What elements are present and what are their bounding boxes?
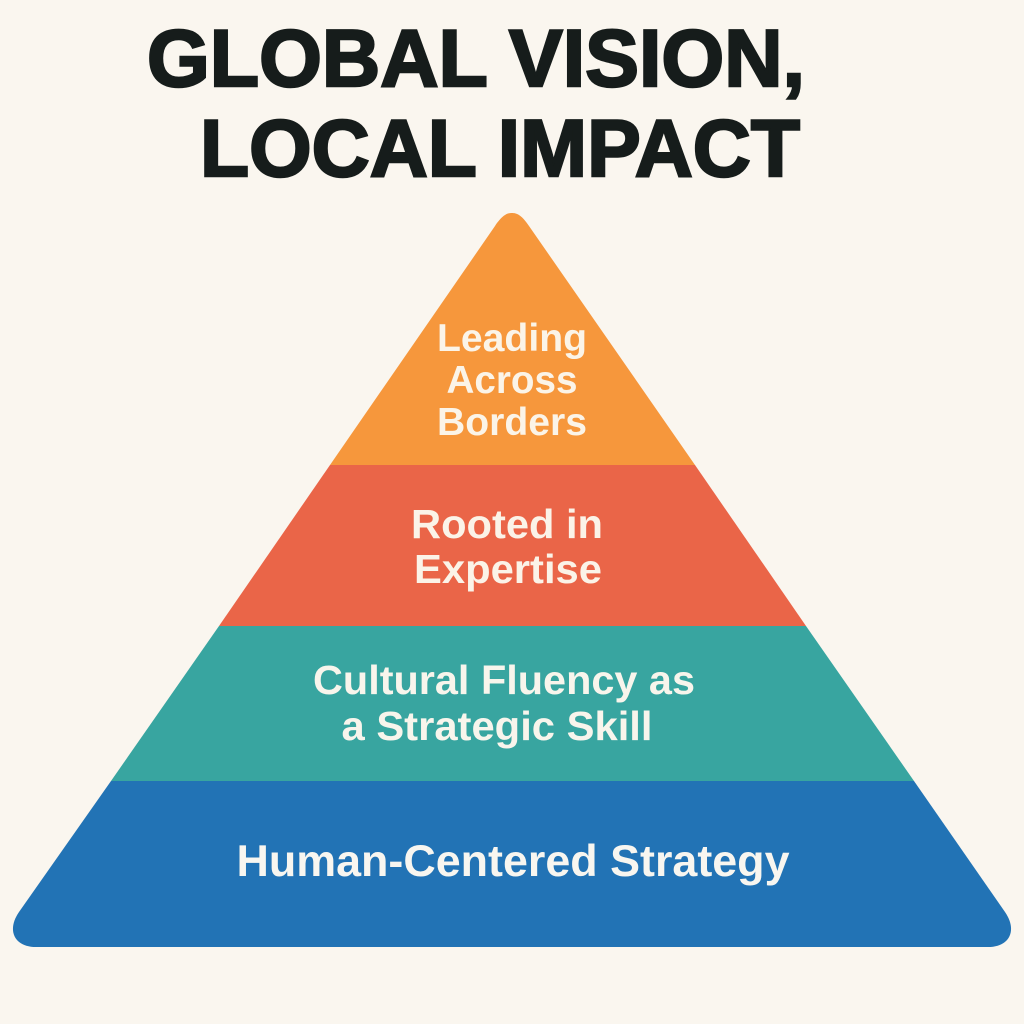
tier 1: Leading Across Borders [330,213,695,465]
title: GLOBAL VISION, [147,14,805,104]
pyramid [13,213,1011,947]
title [147,14,805,194]
tier 2: Rooted in Expertise [219,465,806,626]
tier 2: Rooted in Expertise: Rooted in [411,501,603,547]
tier 1: Leading Across Borders: Across [446,359,578,402]
tier 2: Rooted in Expertise: Expertise [414,546,602,592]
tier 1: Leading Across Borders: Leading [437,317,587,360]
tier 4: Human-Centered Strategy: Human-Centered Strategy [236,837,790,886]
tier 3: Cultural Fluency as a Strategic Skill: a Strategic Skill [342,703,652,749]
tier 1: Leading Across Borders: Borders [437,401,587,444]
title: LOCAL IMPACT [200,104,800,194]
tier 3: Cultural Fluency as a Strategic Skill [111,626,914,781]
tier 4: Human-Centered Strategy [13,781,1011,947]
tier 3: Cultural Fluency as a Strategic Skill: Cultural Fluency as [313,657,695,703]
